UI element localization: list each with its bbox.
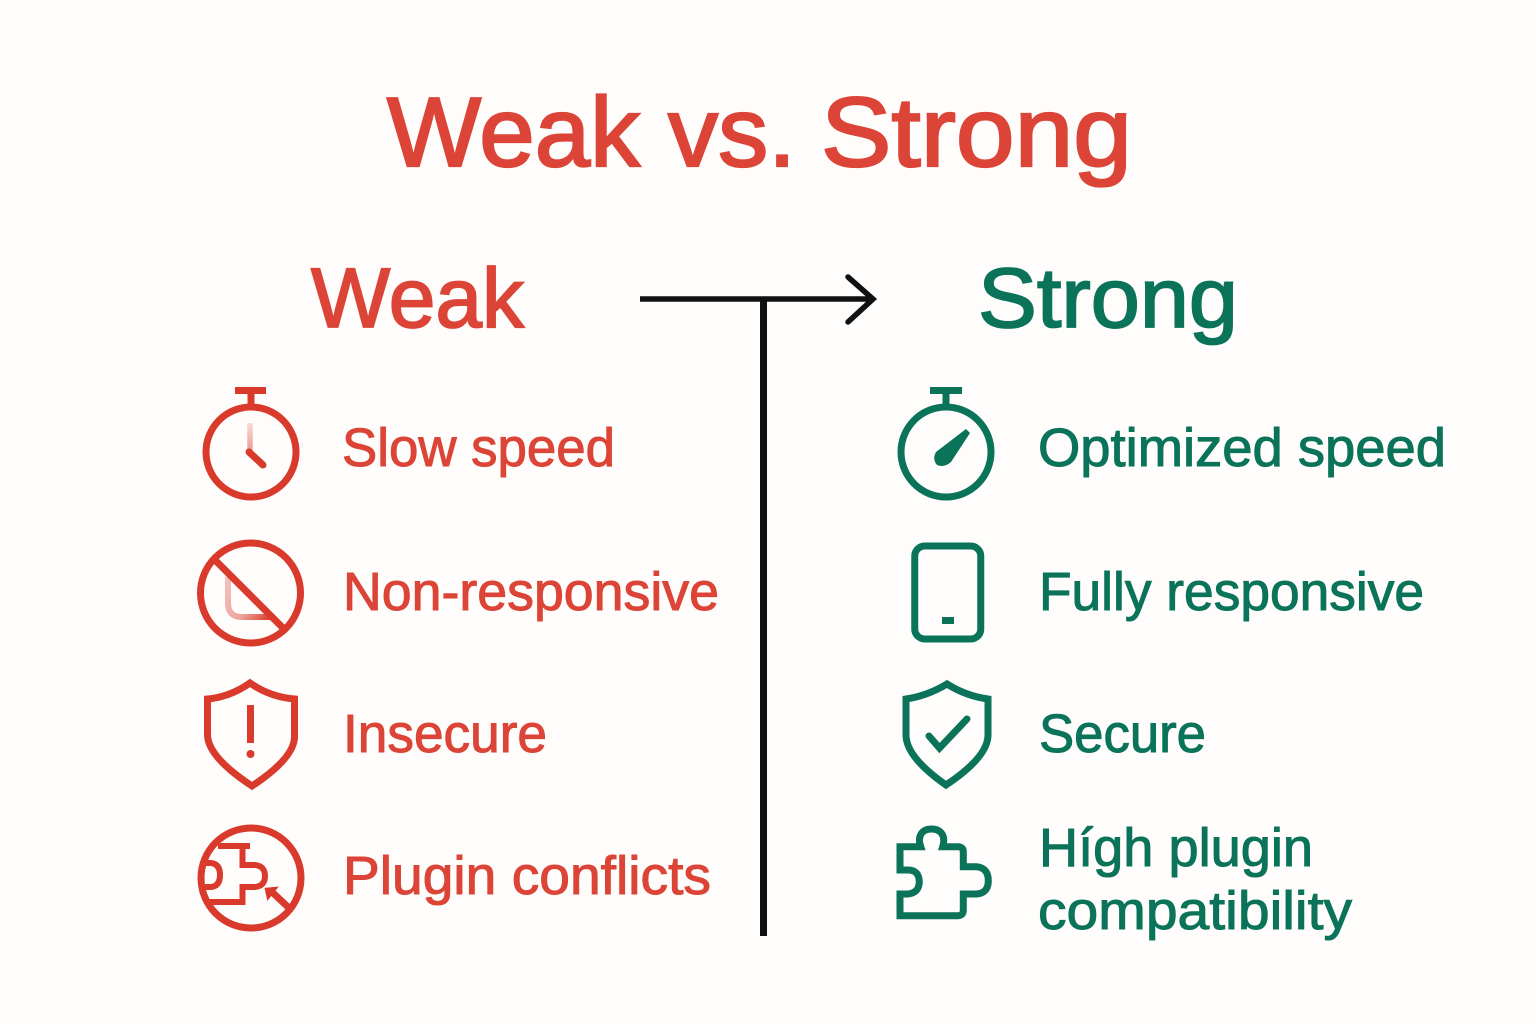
label: High plugin compatibility: compatibility [1038,881,1352,941]
title: vs. [668,77,796,187]
title: Weak [387,77,641,187]
label: Slow speed: Slow speed [342,418,615,478]
heading: Strong: Strong [978,251,1238,345]
icon: phone [915,546,981,639]
label: High plugin compatibility: Hígh plugin [1039,818,1313,878]
icon: slow stopwatch [206,390,296,497]
icon: check shield [906,684,988,785]
label: Secure: Secure [1039,704,1206,764]
label: Non-responsive: Non-responsive [343,562,719,622]
label: Plugin conflicts: Plugin conflicts [343,846,711,906]
title [387,77,1132,187]
label: Insecure: Insecure [343,704,547,764]
heading: Weak: Weak [311,251,525,345]
label: Optimized speed: Optimized speed [1038,418,1446,478]
icon: fast stopwatch [901,390,991,497]
icon: non-responsive ban [200,543,300,643]
title: Strong [821,77,1132,187]
icon: plugin conflict [201,828,301,928]
label: High plugin compatibility [1038,818,1352,941]
arrow and divider [640,277,873,936]
icon: warning shield [208,683,295,786]
panel: weak items [200,390,719,928]
panel: strong items [900,390,1446,941]
icon: puzzle piece [900,829,988,916]
label: Fully responsive: Fully responsive [1039,562,1424,622]
